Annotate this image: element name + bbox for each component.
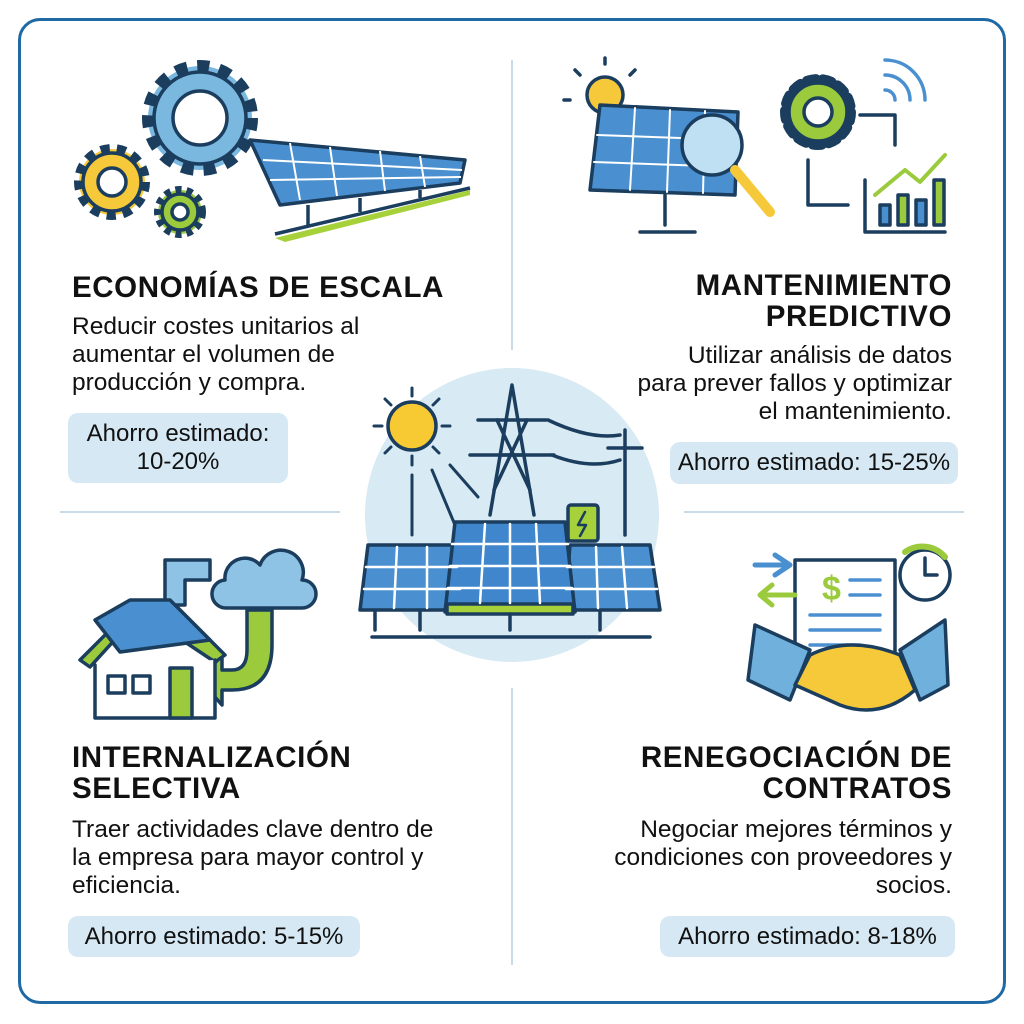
callout: savings bbox=[670, 442, 958, 484]
heading: PREDICTIVO bbox=[766, 300, 952, 333]
text block bbox=[637, 342, 952, 425]
callout: savings bbox=[660, 916, 955, 957]
text block: producción y compra. bbox=[72, 369, 306, 396]
text block bbox=[72, 816, 433, 899]
callout: savings: Ahorro estimado: 5-15% bbox=[85, 922, 343, 950]
panel: renegociacion de contratos bbox=[614, 740, 955, 957]
text block: la empresa para mayor control y bbox=[72, 844, 423, 871]
icon: central solar grid bbox=[360, 368, 660, 662]
heading: MANTENIMIENTO bbox=[696, 269, 952, 302]
text block bbox=[72, 313, 359, 396]
text block: Negociar mejores términos y bbox=[640, 816, 952, 843]
icon: gears and solar array bbox=[79, 66, 470, 242]
heading bbox=[72, 740, 351, 805]
heading: INTERNALIZACIÓN bbox=[72, 741, 351, 774]
callout: savings: Ahorro estimado: 15-25% bbox=[678, 449, 950, 476]
panel: mantenimiento predictivo bbox=[637, 269, 958, 484]
text block: el mantenimiento. bbox=[759, 398, 952, 425]
text block: condiciones con proveedores y bbox=[614, 844, 952, 871]
text block: socios. bbox=[876, 872, 952, 899]
callout: savings bbox=[68, 413, 288, 483]
icon: contract handshake: $ bbox=[822, 570, 841, 608]
heading: CONTRATOS bbox=[762, 772, 952, 805]
heading: SELECTIVA bbox=[72, 772, 241, 805]
panel: economias de escala bbox=[68, 270, 444, 483]
icon: predictive maintenance bbox=[564, 58, 945, 232]
text block: Utilizar análisis de datos bbox=[688, 342, 952, 369]
text block: eficiencia. bbox=[72, 872, 181, 899]
heading bbox=[696, 269, 952, 333]
text block: Reducir costes unitarios al bbox=[72, 313, 359, 340]
text block bbox=[614, 816, 952, 899]
icon: house and cloud bbox=[80, 550, 316, 718]
panel: internalizacion selectiva bbox=[68, 740, 433, 957]
callout: savings: Ahorro estimado: bbox=[87, 420, 269, 447]
callout: savings: Ahorro estimado: 8-18% bbox=[678, 922, 937, 950]
icon: contract handshake bbox=[748, 547, 950, 710]
text block: para prever fallos y optimizar bbox=[637, 370, 952, 397]
text block: aumentar el volumen de bbox=[72, 341, 335, 368]
heading bbox=[641, 740, 952, 805]
callout: savings bbox=[68, 916, 360, 957]
text block: Traer actividades clave dentro de bbox=[72, 816, 433, 843]
callout: savings: 10-20% bbox=[137, 448, 219, 475]
heading: RENEGOCIACIÓN DE bbox=[641, 741, 952, 774]
heading: ECONOMÍAS DE ESCALA bbox=[72, 271, 444, 304]
